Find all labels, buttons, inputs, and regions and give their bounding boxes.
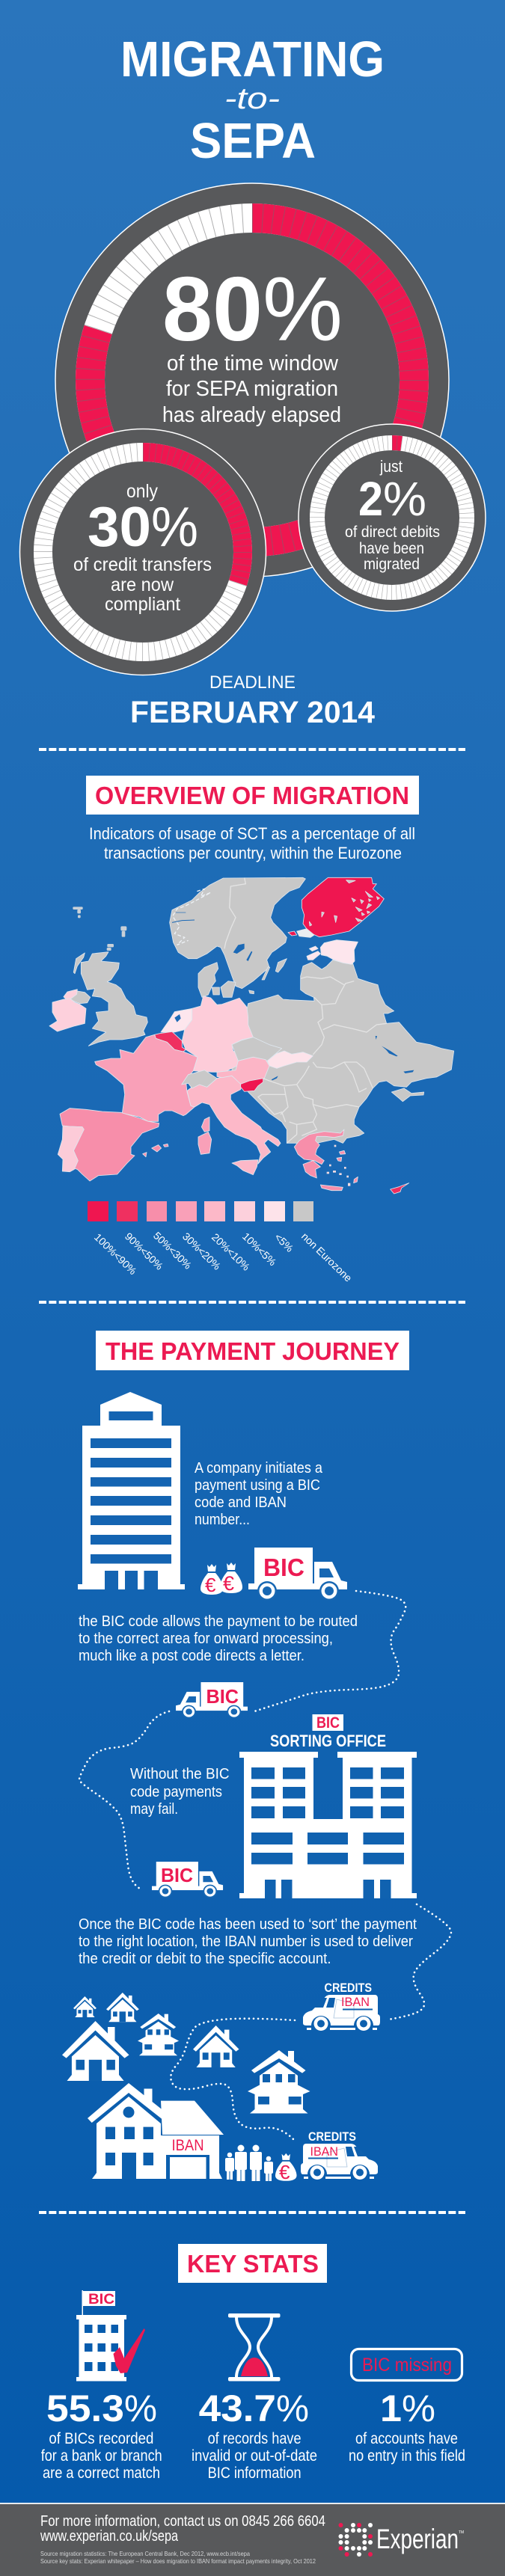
title	[120, 31, 385, 169]
label: BIC flag: BIC	[316, 1714, 340, 1732]
icon: large house with IBAN garage	[88, 2083, 224, 2179]
panel: 2% direct debits gauge	[299, 424, 486, 611]
icon: BIC truck, outside office: BIC	[161, 1864, 193, 1886]
stat: 43.7%: %	[276, 2388, 309, 2429]
stat: 43.7%	[192, 2388, 317, 2482]
stat: 55.3%: for a bank or branch	[41, 2447, 162, 2465]
legend labels	[92, 1230, 355, 1284]
icon: credits van, facing left: IBAN	[341, 1995, 370, 2009]
stat: 55.3%: 55.3	[46, 2388, 124, 2429]
text: IBAN delivery: the credit or debit to the specific account.	[79, 1951, 331, 1967]
icon: credits van, facing right: CREDITS	[308, 2129, 356, 2144]
legend labels: 100%<90%	[92, 1231, 139, 1277]
icon: family	[225, 2145, 273, 2181]
legend labels: 20%<10%	[209, 1231, 252, 1273]
legend: colour scale	[88, 1201, 355, 1284]
text: company initiates: payment using a BIC	[195, 1477, 320, 1494]
text: only 30% of credit transfers are now compliant: 30	[88, 495, 151, 558]
text: just 2% of direct debits have been migrated: migrated	[364, 556, 420, 573]
text: just 2% of direct debits have been migrated	[345, 457, 440, 573]
legend labels: <5%	[272, 1231, 296, 1254]
figure: 80%: 80	[162, 258, 263, 360]
stat: 55.3%: %	[124, 2388, 157, 2429]
route: dotted path 2	[79, 1711, 169, 1889]
legend labels: 30%<20%	[180, 1230, 223, 1272]
heading: key stats	[178, 2244, 327, 2283]
stat: 1%: of accounts have	[355, 2430, 458, 2447]
text: IBAN delivery: Once the BIC code has been used to ‘sort’ the payment	[79, 1916, 417, 1933]
icon: euro money bags	[201, 1563, 242, 1596]
icon: BIC missing field	[352, 2349, 462, 2380]
stat: 1%: no entry in this field	[349, 2447, 465, 2465]
text: company initiates: number...	[195, 1512, 250, 1528]
icon: euro money bags: €	[205, 1574, 216, 1596]
icon: houses	[62, 1993, 310, 2114]
title: -to-	[224, 82, 280, 115]
text: BIC code routing: much like a post code directs a letter.	[79, 1648, 304, 1664]
title: MIGRATING	[120, 31, 385, 88]
legend labels: non Eurozone	[299, 1230, 355, 1284]
heading: key stats: KEY STATS	[187, 2250, 319, 2278]
title: SEPA	[190, 113, 316, 169]
contact details: www.experian.co.uk/sepa	[40, 2528, 179, 2545]
stat: 55.3%	[41, 2388, 162, 2482]
icon: bank with BIC flag and tick: BIC	[88, 2292, 114, 2307]
panel: 80% of time window gauge	[55, 183, 449, 577]
icon: hourglass	[228, 2313, 280, 2382]
figure: 80%	[162, 258, 343, 360]
text: IBAN delivery: to the right location, the IBAN number is used to deliver	[79, 1933, 413, 1950]
contact details: For more information, contact us on 0845 266 6604	[40, 2513, 325, 2530]
icon: euro bag: €	[279, 2161, 290, 2183]
stat: 1%: %	[402, 2388, 435, 2429]
sources: Source key stats: Experian whitepaper – How does migration to IBAN format impact payments integrity, Oct 2012	[40, 2557, 316, 2565]
icon: sorting office building	[239, 1752, 417, 1898]
caption: time window: of the time window	[167, 352, 339, 375]
legend labels: 10%<5%	[240, 1230, 279, 1268]
legend labels: 90%<50%	[123, 1230, 165, 1272]
deadline	[130, 672, 375, 729]
text: company initiates: A company initiates a	[195, 1460, 323, 1476]
route: dotted path 3	[388, 1904, 451, 2020]
icon: BIC truck, outside office	[152, 1862, 223, 1898]
icon: credits van, facing right	[301, 2129, 378, 2180]
icon: bank with BIC flag and tick	[76, 2290, 145, 2382]
gauge ring: 30%	[43, 452, 242, 652]
figure: 80%: %	[263, 258, 343, 360]
text: without the BIC: code payments	[130, 1784, 222, 1800]
caption: time window: for SEPA migration	[166, 377, 338, 401]
icon: credits van, facing left	[303, 1981, 380, 2031]
sources: Source migration statistics: The European Central Bank, Dec 2012, www.ecb.int/sepa	[40, 2550, 250, 2557]
heading: the payment journey	[96, 1331, 409, 1370]
text: only 30% of credit transfers are now compliant: compliant	[105, 594, 180, 615]
stat: 43.7%: of records have	[208, 2430, 302, 2447]
text: IBAN delivery	[79, 1916, 417, 1967]
panel: 30% credit transfers gauge	[19, 429, 266, 675]
gauge ring: 2%	[317, 443, 467, 592]
stat: 55.3%: of BICs recorded	[49, 2430, 153, 2447]
sources	[40, 2550, 316, 2565]
stat: 43.7%: 43.7	[199, 2388, 276, 2429]
text: map description: Indicators of usage of SCT as a percentage of all	[89, 824, 415, 843]
label: sorting office: SORTING OFFICE	[270, 1732, 386, 1750]
icon: BIC truck, facing left: BIC	[206, 1685, 239, 1708]
icon: BIC truck	[248, 1548, 347, 1601]
icon: large house with IBAN garage: IBAN	[172, 2137, 203, 2154]
text: BIC code routing	[79, 1613, 358, 1664]
heading: overview of migration: OVERVIEW OF MIGRATION	[95, 782, 409, 809]
text: only 30% of credit transfers are now compliant: of credit transfers	[73, 554, 212, 575]
icon: credits van, facing right: IBAN	[310, 2144, 338, 2159]
stat: 1%	[349, 2388, 465, 2465]
text: company initiates: code and IBAN	[195, 1494, 287, 1511]
gauge ring: 80% elapsed	[90, 218, 414, 542]
text: without the BIC: Without the BIC	[130, 1766, 229, 1782]
icon: euro bag	[275, 2153, 296, 2183]
caption: time window: has already elapsed	[162, 403, 341, 427]
icon: euro money bags: €	[223, 1572, 234, 1595]
icon: company building	[78, 1392, 185, 1589]
text: just 2% of direct debits have been migrated: have been	[359, 540, 424, 557]
text: just 2% of direct debits have been migrated: %	[383, 472, 426, 526]
route: dotted path 1	[254, 1591, 405, 1711]
text: map description	[89, 824, 415, 862]
icon: BIC truck, facing left	[176, 1682, 248, 1718]
caption: time window	[162, 352, 341, 427]
text: without the BIC: may fail.	[130, 1801, 178, 1818]
contact details	[40, 2513, 325, 2545]
text: only 30% of credit transfers are now compliant: only	[126, 481, 158, 502]
logo: Experian: TM	[459, 2530, 464, 2535]
text: just 2% of direct debits have been migrated: of direct debits	[345, 524, 440, 541]
icon: BIC truck: BIC	[263, 1554, 304, 1581]
text: map description: transactions per country, within the Eurozone	[104, 844, 402, 862]
text: only 30% of credit transfers are now compliant: are now	[111, 574, 174, 595]
deadline: FEBRUARY 2014	[130, 695, 375, 729]
text: just 2% of direct debits have been migrated: 2	[358, 472, 383, 526]
legend labels: 50%<30%	[151, 1230, 194, 1272]
icon: credits van, facing left: CREDITS	[325, 1981, 372, 1995]
text: only 30% of credit transfers are now compliant: %	[151, 495, 198, 558]
text: BIC code routing: the BIC code allows the payment to be routed	[79, 1613, 358, 1630]
text: just 2% of direct debits have been migrated: just	[379, 457, 403, 476]
footer	[0, 2503, 505, 2576]
text: only 30% of credit transfers are now compliant	[73, 481, 212, 615]
stat: 43.7%: BIC information	[208, 2465, 302, 2482]
heading: the payment journey: THE PAYMENT JOURNEY	[105, 1337, 400, 1365]
deadline: DEADLINE	[209, 672, 296, 693]
stat: 55.3%: are a correct match	[43, 2465, 160, 2482]
heading: overview of migration	[86, 776, 419, 815]
icon: BIC missing field: BIC missing	[362, 2355, 452, 2376]
logo: Experian: Experian	[376, 2524, 459, 2554]
text: company initiates	[195, 1460, 323, 1528]
text: BIC code routing: to the correct area for onward processing,	[79, 1631, 333, 1647]
route: dotted path 4	[171, 2019, 295, 2141]
stat: 1%: 1	[380, 2388, 402, 2429]
logo: Experian	[338, 2523, 464, 2557]
map: Europe SCT usage by country	[49, 877, 454, 1194]
stat: 43.7%: invalid or out-of-date	[192, 2447, 317, 2465]
text: without the BIC	[130, 1766, 229, 1818]
